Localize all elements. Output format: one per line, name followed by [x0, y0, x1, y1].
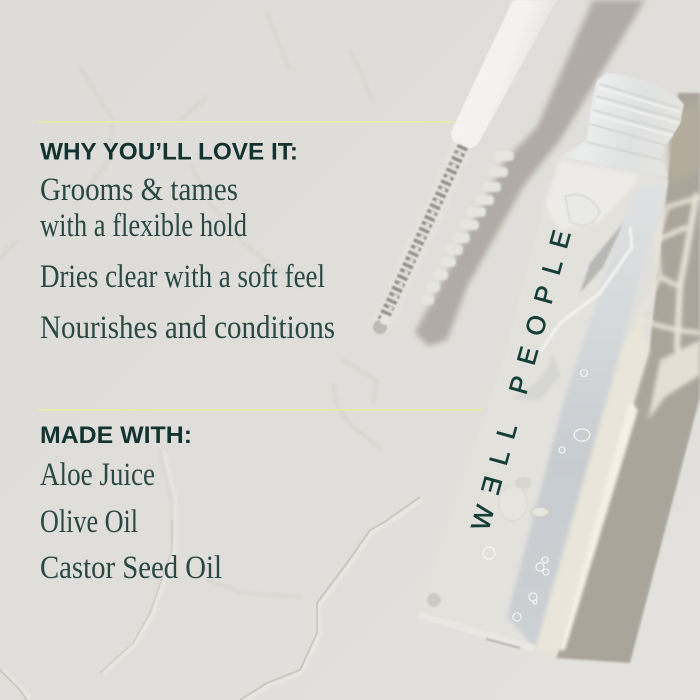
benefit: grooms and tames: [40, 172, 247, 244]
panel: made with: [40, 422, 222, 586]
ingredient: olive oil: Olive Oil: [40, 504, 138, 540]
bright refracted band: [535, 318, 650, 657]
bottle label: WELL PEOPLE: WƎLL PEOPLE: [465, 227, 577, 534]
brush wand: [373, 0, 557, 334]
divider: middle: [38, 409, 483, 411]
upper shoulder highlight: [545, 160, 640, 230]
heading: why you'll love it: WHY YOU’LL LOVE IT:: [40, 138, 298, 166]
benefit: nourishes: Nourishes and conditions: [40, 310, 335, 346]
gel swirl: [512, 195, 632, 400]
heading: made with: MADE WITH:: [40, 422, 192, 449]
spiral bristles: [373, 146, 463, 334]
bottle body: [418, 157, 668, 650]
divider: top: [38, 121, 455, 123]
bottle: [418, 73, 684, 657]
gel bubbles: [483, 370, 590, 621]
panel: why you'll love it: [40, 138, 335, 346]
bristle shadows: [421, 151, 514, 305]
benefit: dries clear: Dries clear with a soft feel: [40, 259, 325, 295]
bottle cast shadow with water caustics: [556, 93, 700, 663]
brush shadow: [415, 0, 645, 346]
white handle: [451, 0, 557, 148]
leaf emblem in gel: [499, 477, 549, 521]
ingredient: aloe juice: Aloe Juice: [40, 457, 155, 493]
benefit: grooms and tames: with a flexible hold: [40, 208, 247, 244]
bottle neck with thread: [560, 73, 684, 177]
ingredient: castor seed oil: Castor Seed Oil: [40, 550, 222, 586]
benefit: grooms and tames: Grooms & tames: [40, 172, 238, 208]
blue-grey gel band: [507, 182, 667, 648]
bottle base: [418, 612, 535, 652]
